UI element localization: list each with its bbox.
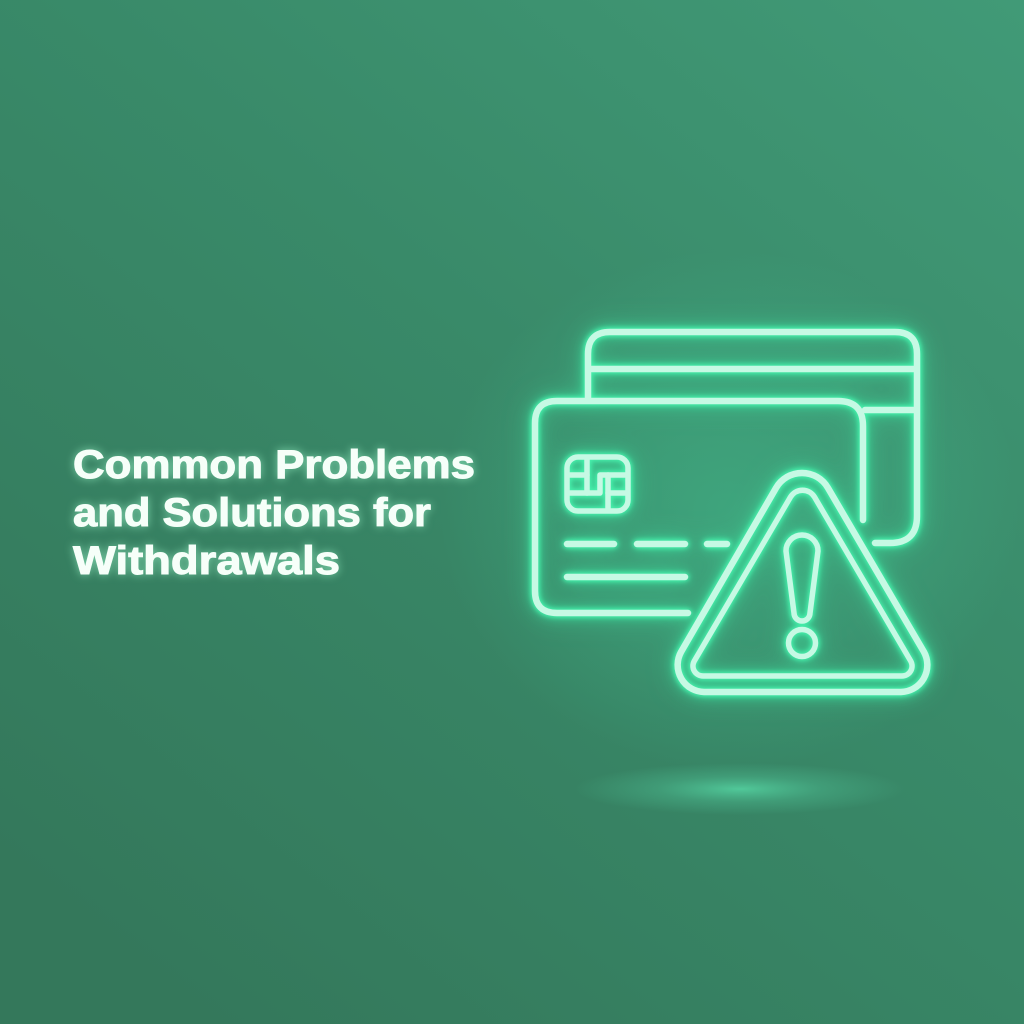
icon: exclamation mark <box>786 535 818 656</box>
icon: back credit card <box>588 332 917 543</box>
title: Withdrawals <box>73 539 340 583</box>
card number dashes <box>567 544 727 577</box>
icon: credit cards with warning triangle <box>535 332 927 692</box>
icon: front credit card <box>535 401 863 613</box>
icon: warning triangle <box>678 473 927 692</box>
icon: card chip <box>567 457 628 511</box>
title <box>73 443 475 583</box>
icon halo <box>440 250 1020 770</box>
title: and Solutions for <box>73 491 431 535</box>
title: Common Problems <box>73 443 475 487</box>
floor glow <box>575 763 905 815</box>
